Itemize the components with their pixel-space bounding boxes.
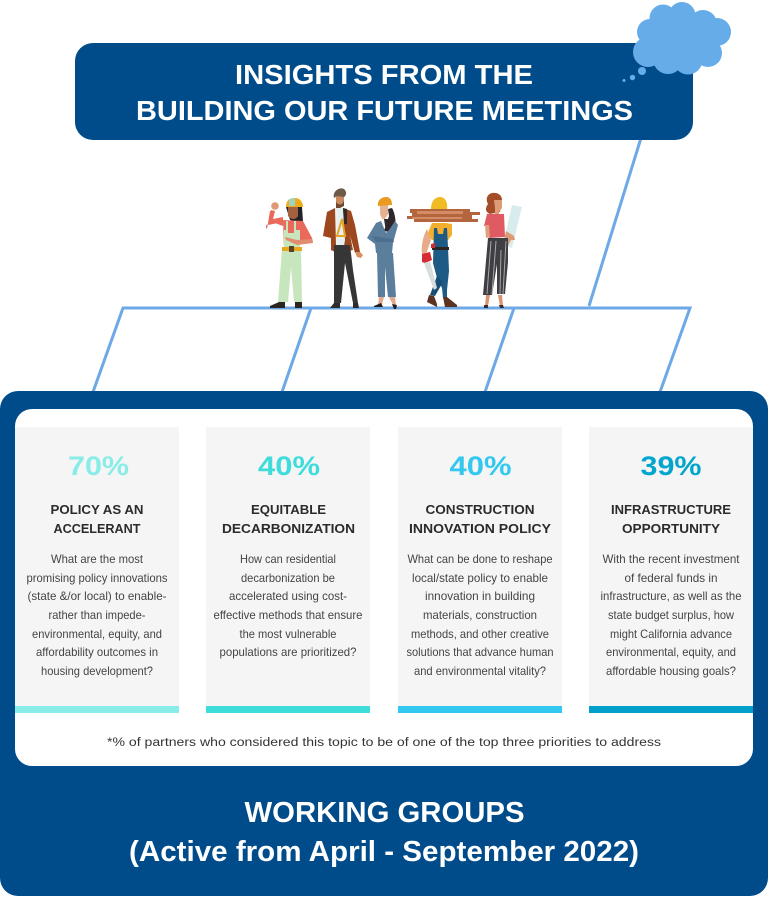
figure: worker in green overalls (266, 198, 313, 308)
card: policy as an accelerant: affordability outcomes in (36, 646, 158, 659)
title banner: BUILDING OUR FUTURE MEETINGS (136, 95, 633, 126)
card: infrastructure opportunity: 39% (640, 451, 702, 481)
card: construction innovation policy: What can be done to reshape (408, 553, 552, 566)
card: construction innovation policy: solutions that advance human (406, 646, 554, 659)
card: equitable decarbonization: the most vulnerable (240, 628, 336, 641)
figure: man with brown jacket (323, 188, 363, 308)
card: infrastructure opportunity: state budget surplus, how (608, 609, 735, 622)
card: infrastructure opportunity: might California advance (610, 628, 732, 641)
heading: working groups (129, 797, 639, 868)
card: policy as an accelerant: promising policy innovations (26, 572, 168, 585)
card: policy as an accelerant: rather than impede- (48, 609, 146, 622)
card: infrastructure opportunity: With the recent investment (602, 553, 740, 566)
card: policy as an accelerant: environmental, equity, and (32, 628, 162, 641)
card: equitable decarbonization: DECARBONIZATION (222, 521, 355, 536)
card: infrastructure opportunity: of federal funds in (624, 572, 718, 585)
panel: working groups (0, 391, 768, 896)
card: construction innovation policy: materials, construction (423, 609, 537, 622)
card: infrastructure opportunity: environmental, equity, and (606, 646, 736, 659)
card: construction innovation policy: 40% (450, 451, 512, 481)
card: infrastructure opportunity: infrastructure, as well as the (600, 590, 742, 603)
card: construction innovation policy: local/state policy to enable (412, 572, 548, 585)
card: infrastructure opportunity (589, 427, 753, 713)
card: infrastructure opportunity: affordable housing goals? (606, 665, 737, 678)
footnote: *% of partners who considered this topic to be of one of the top three priorities to address (107, 737, 661, 749)
heading: working groups: (Active from April - September 2022) (129, 836, 639, 868)
card: construction innovation policy: INNOVATION POLICY (409, 521, 551, 536)
card: equitable decarbonization: accelerated using cost- (229, 590, 347, 603)
illustration: five building professionals (266, 188, 522, 309)
card: construction innovation policy (398, 427, 562, 713)
card: infrastructure opportunity: INFRASTRUCTURE (611, 502, 731, 517)
figure: woman with blueprints (483, 193, 522, 308)
card: equitable decarbonization: decarbonization be (241, 572, 335, 585)
title banner: INSIGHTS FROM THE (235, 59, 533, 90)
card: construction innovation policy: CONSTRUCTION (426, 502, 534, 517)
card: equitable decarbonization (206, 427, 370, 713)
card: equitable decarbonization: populations are prioritized? (220, 646, 357, 659)
icon: thought cloud (622, 2, 731, 82)
building outline (93, 138, 690, 392)
card: equitable decarbonization: effective methods that ensure (214, 609, 362, 622)
card: policy as an accelerant (15, 427, 179, 713)
card: construction innovation policy: and environmental vitality? (414, 665, 547, 678)
card: policy as an accelerant: (state &/or local) to enable- (28, 590, 167, 603)
card: equitable decarbonization: EQUITABLE (251, 502, 326, 517)
card: policy as an accelerant: What are the most (51, 553, 144, 566)
figure: woman in grey suit (367, 197, 398, 309)
title banner (75, 43, 693, 140)
heading: working groups: WORKING GROUPS (244, 797, 524, 829)
card: policy as an accelerant: ACCELERANT (54, 521, 140, 536)
card: equitable decarbonization: 40% (258, 451, 320, 481)
card: policy as an accelerant: 70% (68, 451, 129, 481)
card: policy as an accelerant: POLICY AS AN (50, 502, 144, 517)
figure: carpenter carrying planks (407, 197, 480, 307)
card: policy as an accelerant: housing development? (41, 665, 154, 678)
card: infrastructure opportunity: OPPORTUNITY (622, 521, 720, 536)
card: construction innovation policy: innovation in building (425, 590, 535, 603)
card: construction innovation policy: methods, and other creative (411, 628, 549, 641)
card: equitable decarbonization: How can residential (240, 553, 336, 566)
